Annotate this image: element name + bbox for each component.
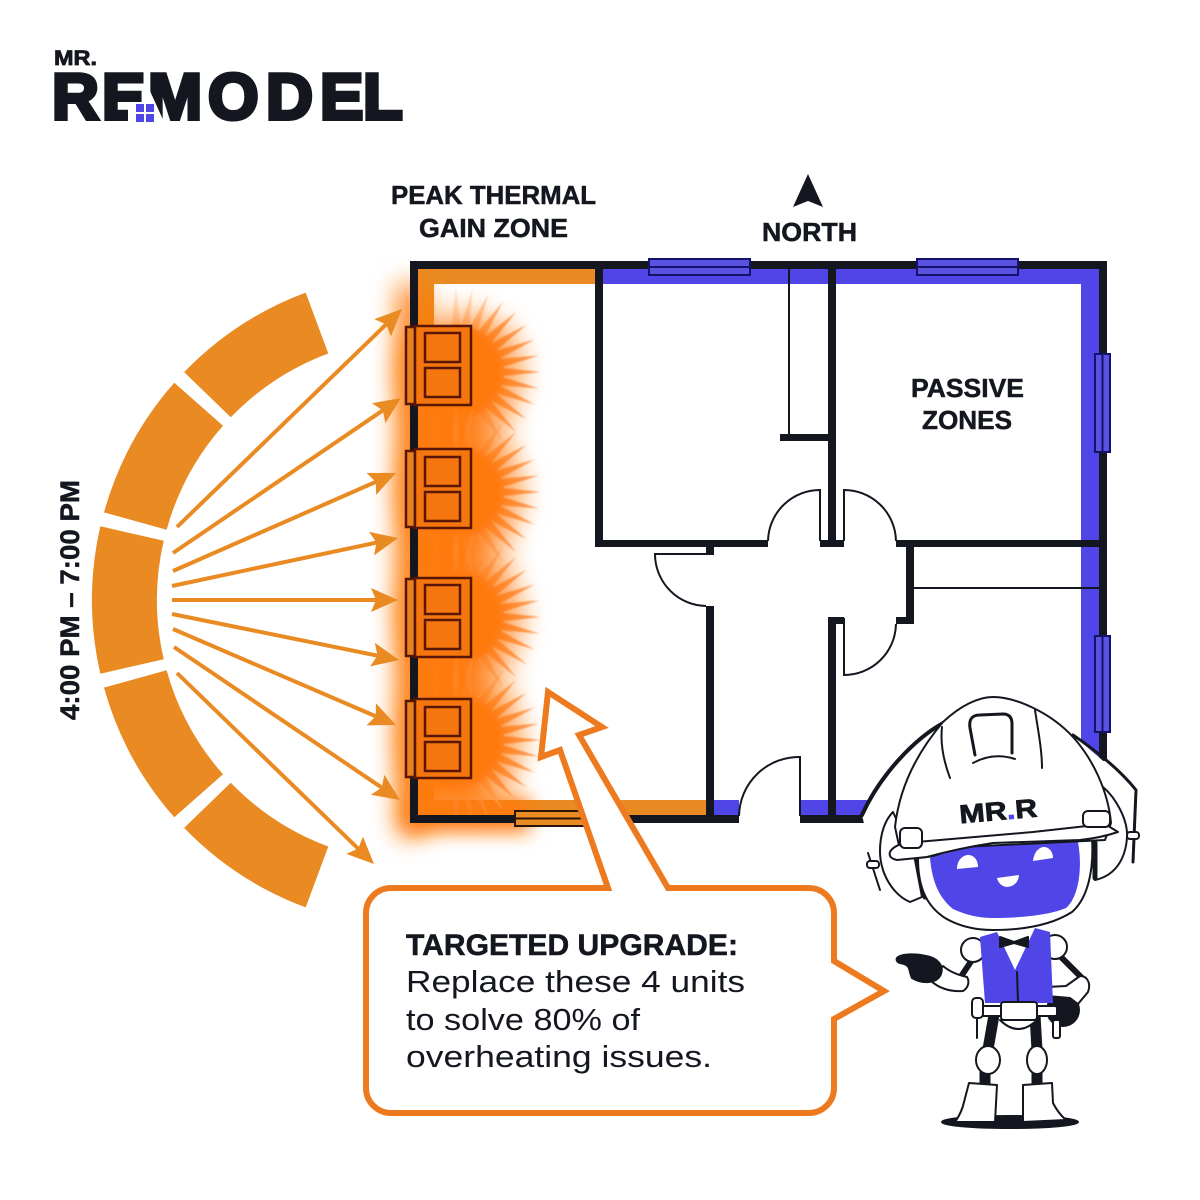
solar ray arrows [172,309,402,864]
passive zones label: ZONES [922,405,1012,435]
passive zones label [911,373,1024,435]
callout with arrow: TARGETED UPGRADE: [406,929,738,962]
headband [862,722,1139,892]
time label: 4:00 PM – 7:00 PM [55,480,85,720]
boots [955,1083,1066,1122]
south window [515,811,590,826]
ear muffs [880,787,1127,902]
callout with arrow: overheating issues. [406,1039,712,1074]
legs [985,1015,1037,1088]
visor [930,842,1080,918]
floor plan [406,259,1110,826]
walls [410,261,1107,823]
head [918,838,1092,930]
north windows [649,259,1110,732]
callout with arrow: to solve 80% of [406,1002,640,1037]
heading: peak thermal gain zone: GAIN ZONE [419,213,568,243]
knees [976,1046,1047,1074]
heading: peak thermal gain zone: PEAK THERMAL [391,180,596,210]
heat zone glow [398,269,706,835]
helmet label: MR.R [958,793,1039,829]
eyes and smile [957,847,1053,887]
heading: peak thermal gain zone [391,180,596,243]
helmet [890,697,1118,860]
doors and thin lines [655,269,1099,816]
tool belt [972,998,1060,1038]
west window units [406,326,471,778]
logo: Mr. Remodel: REMODEL [52,60,403,133]
right arm [1043,935,1089,1026]
callout with arrow [366,692,884,1113]
callout with arrow: Replace these 4 units [406,964,745,999]
passive zones label: PASSIVE [911,373,1024,403]
passive zone bands [603,269,1099,815]
north label: NORTH [762,217,857,247]
north arrow [793,174,823,207]
logo: Mr. Remodel: MR. [54,47,97,70]
mascot: Mr. R robot [862,697,1139,1128]
shadow [942,1116,1078,1128]
left arm [897,938,985,991]
vest [980,928,1053,1003]
sun path arc [92,293,328,907]
